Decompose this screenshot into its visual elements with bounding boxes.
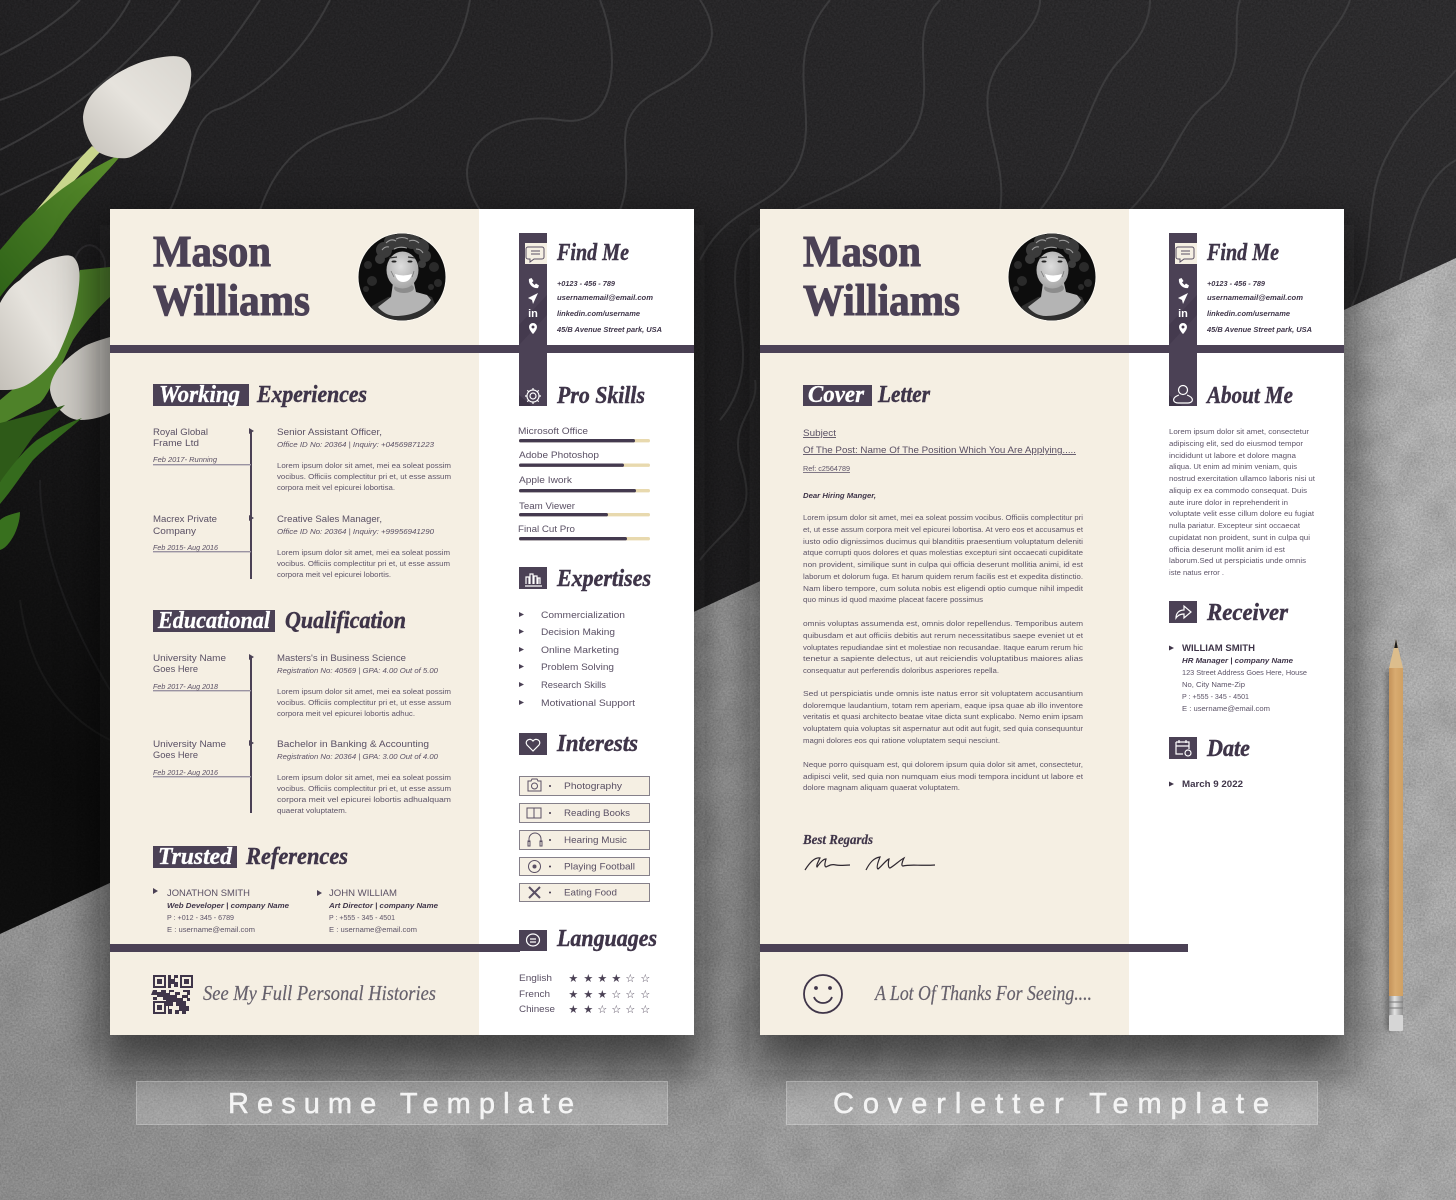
interest: reading books: Reading Books bbox=[564, 808, 631, 818]
salutation: Dear Hiring Manger, bbox=[803, 491, 876, 500]
timeline: education history: Goes Here bbox=[153, 664, 198, 674]
icon: chat bubble bbox=[526, 247, 544, 262]
section: find me: Find Me bbox=[556, 240, 629, 266]
section: find me: 45/B Avenue Street park, USA bbox=[556, 325, 662, 334]
section: about me: laborum.Sed ut perspiciatis unde omnis bbox=[1169, 556, 1306, 565]
interest: photography bbox=[520, 776, 650, 796]
heading: name bbox=[803, 227, 960, 325]
letter paragraph 4: Neque porro quisquam est, qui dolorem ipsum quia dolor sit amet, consectetur, bbox=[803, 760, 1083, 769]
heading: cover letter: Cover bbox=[808, 382, 865, 408]
section: find me: +0123 - 456 - 789 bbox=[557, 279, 616, 288]
letter paragraph 2: omnis voluptas assumenda est, omnis dolor repellendus. Temporibus autem bbox=[803, 619, 1083, 628]
heading: cover letter: Letter bbox=[877, 382, 931, 408]
subject lines bbox=[803, 428, 1076, 473]
photo: portrait bbox=[358, 232, 446, 322]
section: pro skills: Final Cut Pro bbox=[518, 524, 575, 534]
interest: eating food: Eating Food bbox=[564, 888, 617, 898]
timeline: education history: University Name bbox=[153, 653, 226, 663]
section: expertises: Research Skills bbox=[541, 680, 607, 690]
timeline: education history: vocibus. Officiis complectitur pri et, ut esse assum bbox=[277, 784, 451, 793]
section: about me: iste natus error . bbox=[1169, 568, 1224, 577]
section: about me: aliquip ex ea commodo consequat. Duis bbox=[1169, 486, 1307, 495]
letter paragraph 1: atque corrupti quos dolores et quas molestias excepturi sint occaecati cupiditate bbox=[803, 548, 1083, 557]
letter paragraph 3: veritatis et quasi architecto beatae vitae dicta sunt explicabo. Nemo enim ipsam bbox=[803, 712, 1083, 721]
section: interests bbox=[519, 731, 650, 902]
icon: smiley bbox=[804, 975, 842, 1013]
timeline: work history: vocibus. Officiis complectitur pri et, ut esse assum bbox=[277, 559, 450, 568]
section: receiver: E : username@email.com bbox=[1182, 704, 1270, 713]
references list: JONATHON SMITH bbox=[167, 888, 250, 898]
section: pro skills: Microsoft Office bbox=[518, 426, 588, 436]
letter paragraph 4 bbox=[803, 760, 1084, 792]
section: find me: +0123 - 456 - 789 bbox=[1207, 279, 1266, 288]
sign-off: Best Regards bbox=[802, 832, 873, 847]
letter paragraph 1: Lorem ipsum dolor sit amet, mei ea soleat possim vocibus. Officiis complectitur pri bbox=[803, 513, 1083, 522]
timeline: work history: corpora meit vel epicurei lobortisa. bbox=[277, 483, 395, 492]
letter paragraph 3: magni dolores eos qui ratione voluptatem sequi nesciunt. bbox=[803, 736, 1000, 745]
section: expertises: Online Marketing bbox=[541, 645, 619, 655]
interest: playing football: Playing Football bbox=[564, 862, 635, 872]
references list: E : username@email.com bbox=[167, 925, 255, 934]
section: find me bbox=[556, 240, 662, 334]
timeline: education history: University Name bbox=[153, 739, 226, 749]
timeline: work history: Royal Global bbox=[153, 427, 208, 437]
timeline: work history: Frame Ltd bbox=[153, 438, 199, 448]
section: pro skills: Adobe Photoshop bbox=[519, 450, 599, 460]
section: pro skills: Apple Iwork bbox=[519, 475, 573, 485]
timeline: work history: Office ID No: 20364 | Inquiry: +04569871223 bbox=[277, 440, 434, 449]
timeline: work history: vocibus. Officiis complectitur pri et, ut esse assum bbox=[277, 472, 451, 481]
section: receiver: Receiver bbox=[1206, 600, 1289, 626]
section: find me: linkedin.com/username bbox=[1207, 309, 1291, 318]
heading: name: Williams bbox=[803, 276, 960, 325]
icons: contact: in bbox=[528, 308, 538, 320]
letter paragraph 2: voluptates repudiandae sint et molestiae non recusandae. Itaque earum rerum hic bbox=[803, 643, 1083, 652]
section: about me: incididunt ut labore et dolore magna bbox=[1169, 451, 1297, 460]
interest: hearing music: Hearing Music bbox=[564, 835, 628, 845]
timeline: education history: corpora meit vel epicurei lobortis adhuc. bbox=[277, 709, 415, 718]
letter paragraph 1: Nam libero tempore, cum soluta nobis est eligendi optio cumque nihil impedit bbox=[803, 584, 1084, 593]
references list: P : +555 - 345 - 4501 bbox=[329, 913, 395, 922]
timeline: work history: Company bbox=[153, 526, 197, 536]
section: languages: ★★☆☆☆☆ bbox=[568, 1003, 650, 1016]
banner: coverletter template bbox=[786, 1082, 1318, 1124]
timeline: education history: Feb 2012- Aug 2016 bbox=[153, 768, 218, 777]
section: about me: adipiscing elit, sed do eiusmod tempor bbox=[1169, 439, 1303, 448]
letter paragraph 1: laborum et dolorum fuga. Et harum quidem rerum facilis est et expedita distinctio. bbox=[803, 572, 1083, 581]
signature bbox=[805, 857, 935, 870]
section: receiver: 123 Street Address Goes Here, House bbox=[1182, 668, 1307, 677]
section: languages: Chinese bbox=[519, 1004, 555, 1014]
timeline: work history: Office ID No: 20364 | Inquiry: +99956941290 bbox=[277, 527, 434, 536]
letter paragraph 1: iusto odio dignissimos ducimus qui blanditiis praesentium voluptatum deleniti bbox=[803, 537, 1083, 546]
heading: trusted references: References bbox=[245, 844, 348, 870]
letter paragraph 1: et, ut esse assum corpora meit vel epicurei lobortisa. At vero eos et accusamus et bbox=[803, 525, 1084, 534]
section: languages: ★★★☆☆☆ bbox=[568, 988, 650, 1001]
timeline: work history: corpora meit vel epicurei lobortis. bbox=[277, 570, 391, 579]
section: languages: Languages bbox=[556, 926, 657, 952]
subject lines: Ref: c2564789 bbox=[803, 464, 850, 473]
section: interests: Interests bbox=[556, 731, 638, 757]
section: receiver bbox=[1169, 600, 1307, 713]
banner: resume template: Resume Template bbox=[228, 1088, 574, 1120]
background: grey concrete surface bbox=[0, 258, 1456, 1200]
letter paragraph 1: quo minus id quod maxime placeat facere possimus bbox=[803, 595, 983, 604]
section: receiver: WILLIAM SMITH bbox=[1182, 643, 1255, 653]
heading: cover letter bbox=[803, 382, 931, 408]
section: find me: usernamemail@email.com bbox=[557, 293, 653, 302]
letter paragraph 1 bbox=[803, 513, 1084, 604]
heading: educational qualification: Qualification bbox=[285, 608, 406, 634]
section: about me: officia deserunt mollit anim id est bbox=[1169, 545, 1286, 554]
section: about me: nostrud exercitation ullamco laboris nisi ut bbox=[1169, 474, 1316, 483]
pencil bbox=[1386, 639, 1403, 1031]
letter paragraph 3 bbox=[803, 689, 1083, 745]
icon: chat bubble bbox=[1176, 247, 1194, 262]
letter paragraph 2 bbox=[803, 619, 1084, 675]
section: about me: Lorem ipsum dolor sit amet, consectetur bbox=[1169, 427, 1309, 436]
timeline: work history: Feb 2015- Aug 2016 bbox=[153, 543, 218, 552]
timeline: work history: Senior Assistant Officer, bbox=[277, 427, 382, 437]
timeline: education history: corpora meit vel epicurei lobortis adhualquam bbox=[277, 795, 451, 804]
references list bbox=[153, 888, 439, 934]
interest: hearing music bbox=[520, 830, 650, 850]
references list: P : +012 - 345 - 6789 bbox=[167, 913, 234, 922]
timeline: work history: Creative Sales Manager, bbox=[277, 514, 382, 524]
letter paragraph 3: Sed ut perspiciatis unde omnis iste natus error sit voluptatem accusantium bbox=[803, 689, 1083, 698]
section: receiver: No, City Name-Zip bbox=[1182, 680, 1245, 689]
section: receiver: P : +555 - 345 - 4501 bbox=[1182, 692, 1249, 701]
section: languages: English bbox=[519, 973, 552, 983]
background: dark textured surface bbox=[0, 0, 1456, 934]
section: find me: linkedin.com/username bbox=[557, 309, 641, 318]
timeline: education history: Goes Here bbox=[153, 750, 198, 760]
section: about me: aliqua. Ut enim ad minim veniam, quis bbox=[1169, 462, 1297, 471]
section: about me: voluptate velit esse cillum dolore eu fugiat bbox=[1169, 509, 1315, 518]
icon: gear bbox=[525, 388, 541, 404]
icons: contact bbox=[1178, 278, 1189, 334]
footer tagline: A Lot Of Thanks For Seeing.... bbox=[873, 981, 1092, 1005]
section: about me: About Me bbox=[1205, 383, 1293, 409]
timeline: education history: Masters's in Business Science bbox=[277, 653, 406, 663]
references list: Art Director | company Name bbox=[328, 901, 439, 910]
heading: working experiences: Working bbox=[159, 382, 240, 408]
letter paragraph 3: doloremque laudantium, totam rem aperiam, eaque ipsa quae ab illo inventore bbox=[803, 701, 1083, 710]
heading: working experiences: Experiences bbox=[256, 382, 367, 408]
section: date: March 9 2022 bbox=[1182, 779, 1243, 789]
timeline: education history: Bachelor in Banking & Accounting bbox=[277, 739, 429, 749]
heading: name: Mason bbox=[153, 227, 271, 276]
section: receiver: HR Manager | company Name bbox=[1182, 656, 1294, 665]
heading: working experiences bbox=[153, 382, 367, 408]
heading: educational qualification bbox=[153, 608, 406, 634]
heading: name bbox=[153, 227, 310, 325]
timeline: education history: quaerat voluptatem. bbox=[277, 806, 347, 815]
timeline: work history bbox=[153, 427, 451, 579]
letter paragraph 2: tenetur a sapiente delectus, ut aut reiciendis voluptatibus maiores alias bbox=[803, 654, 1083, 663]
subject lines: Of The Post: Name Of The Position Which You Are Applying..... bbox=[803, 445, 1076, 455]
timeline: work history: Macrex Private bbox=[153, 514, 217, 524]
timeline: education history: vocibus. Officiis complectitur pri et, ut esse assum bbox=[277, 698, 451, 707]
section: pro skills: Team Viewer bbox=[519, 501, 575, 511]
timeline: education history: Registration No: 40569 | GPA: 4.00 Out of 5.00 bbox=[277, 666, 438, 675]
section: about me bbox=[1169, 383, 1316, 577]
timeline: work history: Lorem ipsum dolor sit amet, mei ea soleat possim bbox=[277, 461, 451, 470]
section: date: Date bbox=[1206, 736, 1250, 762]
heading: trusted references: Trusted bbox=[158, 844, 233, 870]
section: expertises: Expertises bbox=[556, 566, 651, 592]
timeline: education history: Registration No: 20364 | GPA: 3.00 Out of 4.00 bbox=[277, 752, 438, 761]
interest: reading books bbox=[520, 804, 650, 822]
panel: cover letter page bbox=[760, 209, 1344, 1035]
section: find me: 45/B Avenue Street park, USA bbox=[1206, 325, 1312, 334]
icon: person bbox=[1174, 386, 1192, 403]
section: about me: nulla pariatur. Excepteur sint occaecat bbox=[1169, 521, 1301, 530]
section: about me: cupidatat non proident, sunt in culpa qui bbox=[1169, 533, 1310, 542]
section: pro skills bbox=[518, 383, 650, 540]
section: about me: aute irure dolor in reprehenderit in bbox=[1169, 498, 1288, 507]
banner: resume template bbox=[136, 1082, 668, 1124]
references list: Web Developer | company Name bbox=[167, 901, 290, 910]
heading: name: Mason bbox=[803, 227, 921, 276]
references list: JOHN WILLIAM bbox=[329, 888, 397, 898]
icons: contact bbox=[528, 278, 539, 334]
letter paragraph 4: adipisci velit, sed quia non numquam eius modi tempora incidunt ut labore et bbox=[803, 772, 1084, 781]
heading: educational qualification: Educational bbox=[157, 608, 270, 634]
section: expertises: Problem Solving bbox=[541, 662, 614, 672]
heading: trusted references bbox=[153, 844, 348, 870]
panel: resume page bbox=[110, 209, 694, 1035]
icon: QR code bbox=[151, 975, 193, 1014]
footer tagline: See My Full Personal Histories bbox=[203, 981, 436, 1005]
tulips bbox=[0, 56, 191, 550]
letter paragraph 2: quibusdam et aut officiis debitis aut rerum necessitatibus saepe eveniet ut et bbox=[803, 631, 1084, 640]
section: expertises bbox=[519, 566, 651, 708]
banner: coverletter template: Coverletter Template bbox=[833, 1088, 1269, 1120]
letter paragraph 3: voluptatem quia voluptas sit aspernatur aut odit aut fugit, sed quia consequuntur bbox=[803, 724, 1083, 733]
section: languages bbox=[519, 926, 657, 1016]
section: languages: French bbox=[519, 989, 550, 999]
heading: name: Williams bbox=[153, 276, 310, 325]
section: find me: usernamemail@email.com bbox=[1207, 293, 1303, 302]
letter paragraph 4: dolore magnam aliquam quaerat voluptatem. bbox=[803, 783, 960, 792]
subject lines: Subject bbox=[803, 428, 837, 438]
references list: E : username@email.com bbox=[329, 925, 417, 934]
section: find me bbox=[1206, 240, 1312, 334]
section: expertises: Motivational Support bbox=[541, 698, 636, 708]
timeline: work history: Feb 2017- Running bbox=[153, 455, 217, 464]
timeline: education history bbox=[153, 653, 451, 815]
interest: playing football bbox=[520, 858, 650, 876]
section: date bbox=[1169, 736, 1250, 789]
timeline: education history: Lorem ipsum dolor sit amet, mei ea soleat possim bbox=[277, 687, 451, 696]
section: find me: Find Me bbox=[1206, 240, 1279, 266]
timeline: education history: Feb 2017- Aug 2018 bbox=[153, 682, 218, 691]
interest: photography: Photography bbox=[564, 781, 623, 791]
page shadows bbox=[100, 225, 1354, 1070]
interest: eating food bbox=[520, 884, 650, 902]
section: expertises: Decision Making bbox=[541, 627, 615, 637]
letter paragraph 1: non provident, similique sunt in culpa qui officia deserunt mollitia animi, id est bbox=[803, 560, 1084, 569]
icons: contact: in bbox=[1178, 308, 1188, 320]
timeline: work history: Lorem ipsum dolor sit amet, mei ea soleat possim bbox=[277, 548, 450, 557]
letter paragraph 2: consequatur aut perferendis doloribus asperiores repella. bbox=[803, 666, 999, 675]
timeline: education history: Lorem ipsum dolor sit amet, mei ea soleat possim bbox=[277, 773, 451, 782]
section: expertises: Commercialization bbox=[541, 610, 625, 620]
photo: portrait bbox=[1008, 232, 1096, 322]
section: pro skills: Pro Skills bbox=[556, 383, 645, 409]
section: languages: ★★★★☆☆ bbox=[568, 972, 650, 985]
